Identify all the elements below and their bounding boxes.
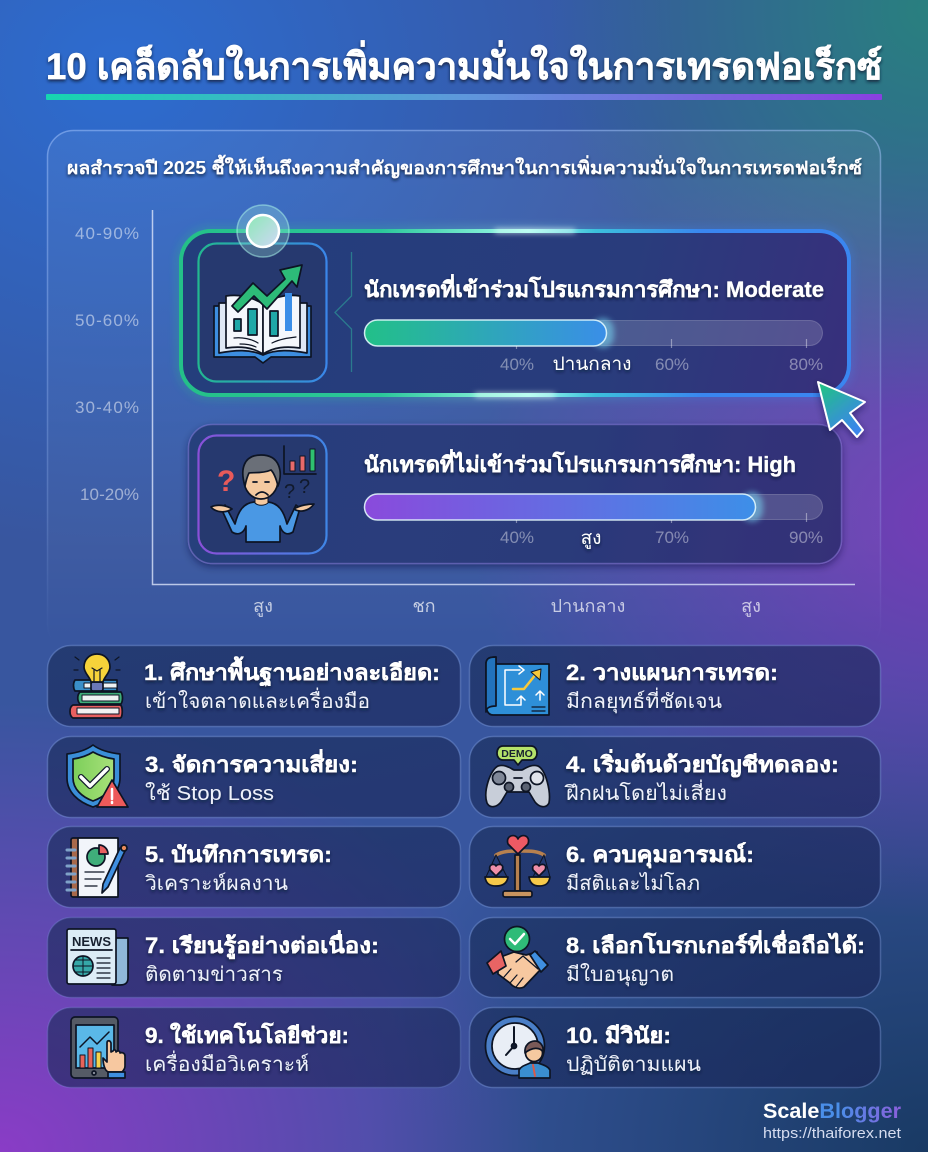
tip 10 <box>470 1008 880 1088</box>
tip detail: มีใบอนุญาต <box>566 963 674 987</box>
pointer divider <box>335 252 352 372</box>
progress bar: high <box>364 492 822 523</box>
y axis labels: 40-90% <box>75 224 139 243</box>
icon frame <box>198 244 326 382</box>
tip heading: 4. เริ่มต้นด้วยบัญชีทดลอง: <box>566 748 839 778</box>
tip heading: 8. เลือกโบรกเกอร์ที่เชื่อถือได้: <box>566 929 865 958</box>
icon: cursor arrow <box>818 382 865 437</box>
icon: tablet with chart and hand <box>71 1017 125 1078</box>
tip detail: เข้าใจตลาดและเครื่องมือ <box>145 687 370 713</box>
tip heading: 10. มีวินัย: <box>566 1023 671 1048</box>
icon: question marks <box>217 465 310 503</box>
bar scale labels: 70% <box>655 528 689 547</box>
bar scale labels: 60% <box>655 355 689 374</box>
bar scale labels: 40% <box>500 528 534 547</box>
brand logo: ScaleBlogger <box>763 1100 901 1123</box>
icon: question marks: ? <box>284 481 295 503</box>
tip 1 <box>48 646 460 726</box>
tip 2 <box>470 646 880 726</box>
icon: demo game controller <box>486 746 549 807</box>
tip detail: มีสติและไม่โลภ <box>566 872 700 895</box>
bar scale labels <box>500 354 823 375</box>
icon: question marks: ? <box>217 465 235 498</box>
icon: strategy map <box>486 657 549 715</box>
icon: question marks: ? <box>299 476 310 498</box>
website url: https://thaiforex.net <box>763 1125 902 1142</box>
card: traders in education program <box>181 230 849 396</box>
tip heading: 6. ควบคุมอารมณ์: <box>566 842 754 869</box>
x axis labels <box>253 596 761 617</box>
bar scale labels: 80% <box>789 355 823 374</box>
progress bar: moderate <box>364 318 822 349</box>
tip 6 <box>470 826 880 908</box>
icon: open book with chart <box>214 265 311 363</box>
panel: survey chart <box>48 130 880 650</box>
tip detail: ฝึกฝนโดยไม่เสี่ยง <box>564 779 727 805</box>
icon: newspaper <box>67 929 128 985</box>
title: 10 เคล็ดลับในการเพิ่มความมั่นใจในการเทรดฟอเร็กซ์ <box>46 40 882 87</box>
tip heading: 7. เรียนรู้อย่างต่อเนื่อง: <box>145 929 379 960</box>
survey heading: ผลสำรวจปี 2025 ชี้ให้เห็นถึงความสำคัญของการศึกษาในการเพิ่มความมั่นใจในการเทรดฟอเร็กซ์ <box>67 154 862 179</box>
bar scale labels: ปานกลาง <box>553 354 631 375</box>
y axis labels <box>75 224 139 504</box>
icon: shield with warning <box>67 745 128 807</box>
tip detail: มีกลยุทธ์ที่ชัดเจน <box>566 687 722 714</box>
tip detail: ใช้ Stop Loss <box>145 782 274 805</box>
highlight streaks <box>475 230 575 396</box>
tip 4 <box>470 736 880 818</box>
tip heading: 3. จัดการความเสี่ยง: <box>145 748 358 777</box>
x axis labels: สูง <box>741 596 761 617</box>
icon: handshake with check <box>487 926 548 988</box>
tip 7 <box>48 918 460 998</box>
x axis labels: ชก <box>412 596 436 616</box>
y axis labels: 50-60% <box>75 311 139 330</box>
icon: clock and person <box>486 1016 550 1078</box>
icon: bulb on books <box>70 654 122 718</box>
tip 5 <box>48 826 460 908</box>
title underline <box>46 94 882 100</box>
icon: balance scale with heart <box>485 836 550 897</box>
tip detail: วิเคราะห์ผลงาน <box>145 872 288 895</box>
x axis labels: สูง <box>253 596 273 617</box>
tip detail: ปฏิบัติตามแผน <box>566 1054 701 1076</box>
marker node <box>237 205 289 257</box>
bar scale labels: 90% <box>789 528 823 547</box>
tip 9 <box>48 1008 460 1088</box>
y axis labels: 10-20% <box>80 485 139 504</box>
bar scale labels: 40% <box>500 355 534 374</box>
tip 8 <box>470 918 880 998</box>
icon: notebook and pen <box>67 838 127 897</box>
demo label: DEMO <box>501 748 533 760</box>
x axis labels: ปานกลาง <box>551 596 625 616</box>
bar scale labels: สูง <box>581 528 601 549</box>
tip heading: 2. วางแผนการเทรด: <box>566 660 778 685</box>
card: traders without education program <box>188 424 842 564</box>
news label: NEWS <box>72 934 111 949</box>
card heading: นักเทรดที่ไม่เข้าร่วมโปรแกรมการศึกษา: High <box>364 448 796 477</box>
chart axes <box>152 210 855 584</box>
tip 3 <box>48 736 460 818</box>
bar scale labels <box>500 528 823 549</box>
tip heading: 5. บันทึกการเทรด: <box>145 842 332 867</box>
card heading: นักเทรดที่เข้าร่วมโปรแกรมการศึกษา: Moderate <box>364 273 824 302</box>
tip detail: เครื่องมือวิเคราะห์ <box>145 1050 309 1076</box>
tip heading: 9. ใช้เทคโนโลยีช่วย: <box>145 1022 349 1048</box>
icon frame <box>198 436 326 554</box>
icon: confused trader <box>211 446 316 542</box>
tip heading: 1. ศึกษาพื้นฐานอย่างละเอียด: <box>144 656 440 687</box>
y axis labels: 30-40% <box>75 398 139 417</box>
tip detail: ติดตามข่าวสาร <box>145 964 283 986</box>
